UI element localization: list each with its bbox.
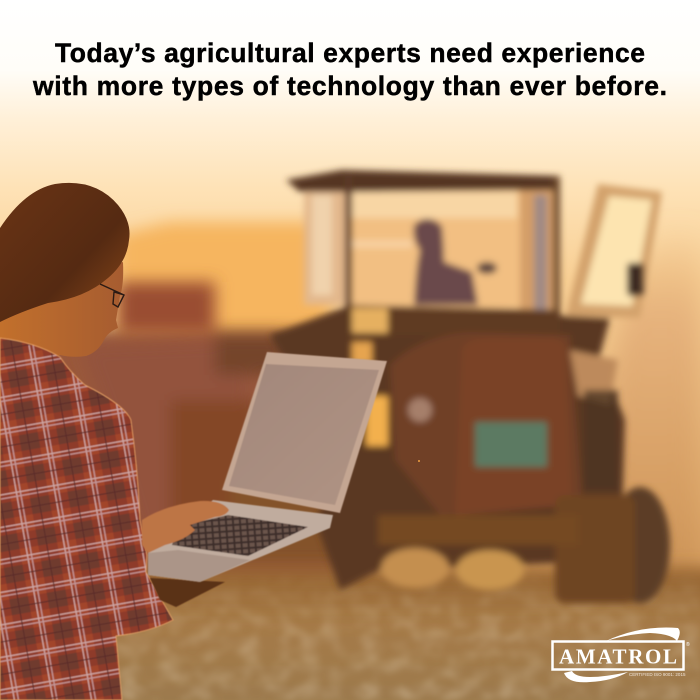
crop speckle texture [118,586,700,700]
tractor side panel [570,350,618,405]
tractor cab window [348,186,523,308]
hair [0,183,130,322]
title line 2: with more types of technology than ever before. [32,71,667,101]
tractor body [270,305,640,590]
title [32,38,667,101]
tractor open door [566,184,662,318]
tractor steering wheel [477,262,497,274]
hand on keyboard [142,501,229,553]
crop field [100,568,700,700]
Amatrol logo [552,628,690,682]
tractor right pillar [520,186,556,311]
logo swoosh top [606,628,680,641]
logo registered mark: ® [686,641,690,648]
tractor front wheel [610,487,670,603]
tractor mirror [627,263,644,296]
blurred farm machine behind the woman [80,282,350,565]
laptop lid [222,352,387,513]
speck [418,460,420,462]
laptop screen [229,364,379,505]
plaid shirt [0,338,173,700]
forearm under laptop [150,578,225,607]
logo wordmark: AMATROL [559,644,677,668]
logo certification text: CERTIFIED ISO 9001: 2015 [629,672,686,677]
distant horizon and field [0,222,340,590]
neck and face [0,262,123,360]
logo box [552,642,684,670]
tractor cab left pillar [304,185,346,305]
field patches under tractor [381,548,449,588]
laptop base [148,500,333,582]
tractor lights and gaps [352,308,388,333]
laptop keyboard [172,515,308,556]
tractor green grille panel [475,422,547,467]
glasses [100,284,124,307]
woman holding laptop [0,183,225,700]
title line 1: Today’s agricultural experts need experience [55,38,645,68]
tractor hood [390,332,582,515]
tractor driver silhouette [414,219,478,305]
tractor roof [286,170,560,192]
logo swoosh bottom [564,671,628,682]
tractor axle [378,515,578,545]
dust haze on the right [590,225,700,700]
laptop [142,352,387,582]
blurred tractor [270,170,670,603]
